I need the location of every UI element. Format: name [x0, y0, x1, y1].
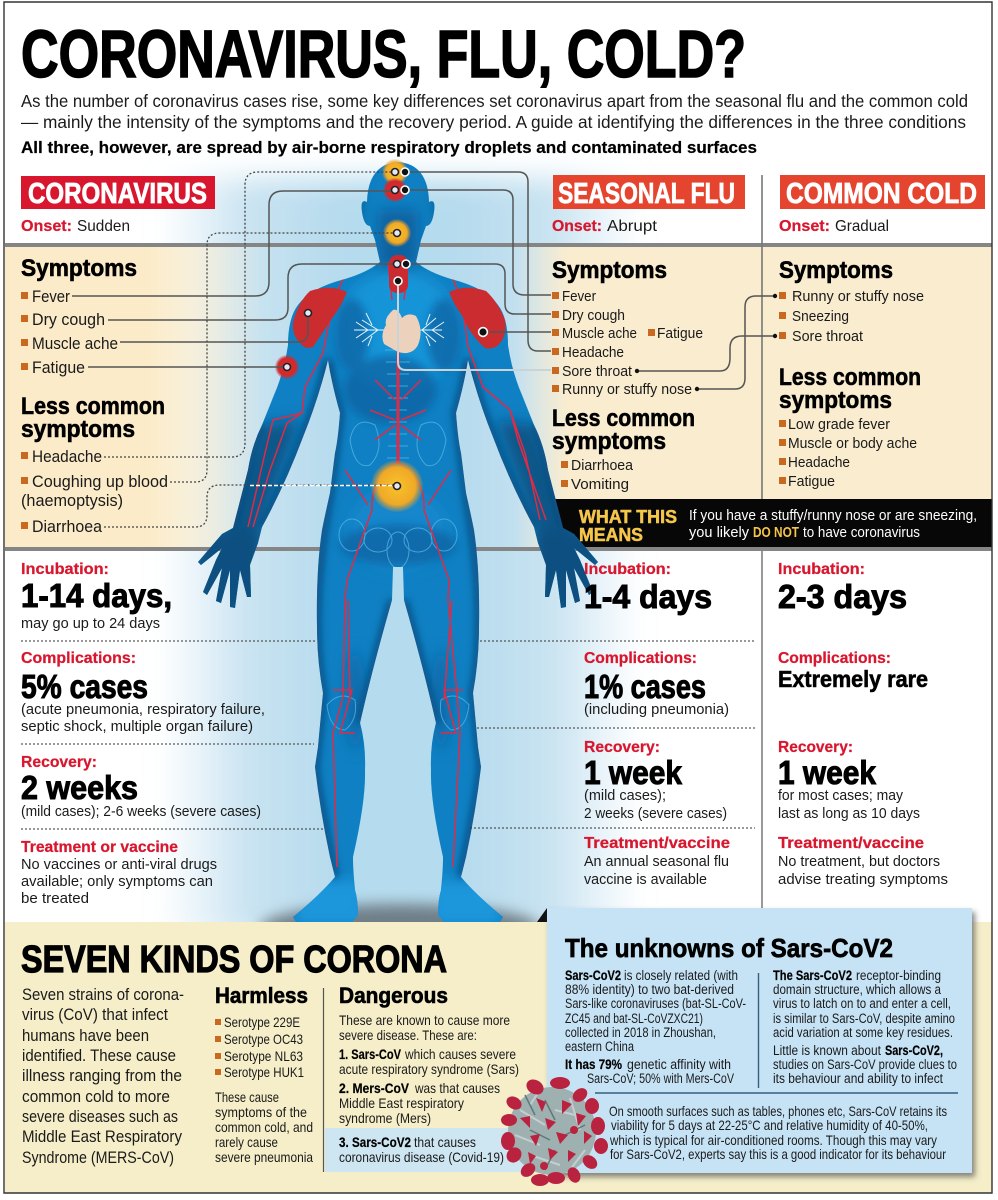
rim shading — [233, 360, 563, 877]
intro paragraph — [22, 985, 184, 1167]
right text column: studies on Sars-CoV provide clues to — [773, 1057, 957, 1072]
left text column — [565, 968, 746, 1086]
sars-cov2 highlight — [325, 1128, 525, 1172]
symptoms list: Symptoms — [779, 257, 893, 284]
left text column: Sars-like coronaviruses (bat-SL-CoV- — [565, 996, 746, 1011]
heading: The unknowns of Sars-CoV2 — [565, 933, 893, 963]
less common symptoms list: Diarrhoea — [32, 518, 103, 536]
left text column: Sars-CoV2 — [565, 968, 621, 983]
left text column: eastern China — [565, 1039, 634, 1054]
intro paragraph: Seven strains of corona- — [22, 985, 184, 1004]
dangerous column: 2. Mers-CoV — [339, 1080, 410, 1096]
right text column — [773, 968, 957, 1086]
dangerous column: syndrome (Mers) — [339, 1110, 431, 1126]
less common symptoms list — [552, 405, 695, 493]
right text column: acid variation at some key residues. — [773, 1025, 953, 1040]
organs shading — [335, 299, 461, 565]
complications — [778, 650, 928, 692]
dangerous column: 1. Sars-CoV — [339, 1046, 402, 1062]
treatment: Treatment/vaccine — [778, 835, 924, 852]
panel: common cold column — [778, 175, 985, 888]
recovery — [584, 739, 727, 822]
less common symptoms list: Fatigue — [788, 473, 835, 490]
recovery: Recovery: — [584, 739, 660, 756]
recovery — [778, 739, 920, 822]
surfaces paragraph: viability for 5 days at 22-25°C and relative humidity of 40-50%, — [611, 1117, 928, 1133]
symptoms list: Fatigue — [32, 359, 85, 377]
intro paragraph: common cold to more — [22, 1087, 170, 1106]
dangerous column: which causes severe — [404, 1046, 516, 1062]
treatment: No vaccines or anti-viral drugs — [21, 856, 217, 873]
intro text: All three, however, are spread by air-borne respiratory droplets and contaminated surfaces — [21, 138, 757, 157]
intro paragraph: Middle East Respiratory — [22, 1127, 182, 1146]
incubation — [778, 561, 907, 615]
recovery: for most cases; may — [778, 787, 903, 804]
icon: coronavirus particle — [501, 1076, 608, 1186]
right text column: Little is known about — [773, 1043, 881, 1058]
dangerous column: 3. Sars-CoV2 — [339, 1134, 411, 1150]
recovery: (mild cases); — [584, 787, 666, 804]
what this means callout: you likely — [689, 524, 749, 541]
less common symptoms list: (haemoptysis) — [21, 492, 123, 510]
incubation: 1-14 days, — [21, 577, 172, 614]
left text column: genetic affinity with — [627, 1057, 731, 1072]
treatment: vaccine is available — [584, 871, 707, 888]
symptoms list: Fever — [32, 288, 70, 306]
complications: Extremely rare — [778, 666, 928, 692]
connector dots — [284, 168, 777, 490]
symptoms list: Sneezing — [792, 308, 849, 325]
surfaces paragraph: which is typical for air-conditioned rooms. Though this may vary — [609, 1132, 937, 1148]
less common symptoms list: Low grade fever — [788, 416, 890, 433]
onset: Abrupt — [607, 218, 658, 235]
harmless column: common cold, and — [215, 1119, 313, 1135]
complications: Complications: — [778, 650, 891, 667]
bright and dark shading — [195, 153, 601, 925]
human body figure — [190, 153, 610, 925]
bones and organ outlines — [327, 350, 469, 730]
recovery: Recovery: — [778, 739, 853, 756]
complications: septic shock, multiple organ failure) — [21, 718, 253, 735]
symptoms list: Symptoms — [552, 257, 667, 284]
dangerous column — [339, 983, 519, 1165]
symptoms list: Runny or stuffy nose — [792, 288, 924, 305]
dangerous column: These are known to cause more — [339, 1012, 510, 1028]
less common symptoms list — [779, 364, 921, 490]
treatment: advise treating symptoms — [778, 871, 948, 888]
right text column: Sars-CoV2, — [885, 1043, 943, 1058]
intro text — [21, 91, 968, 157]
left text column: Sars-CoV; 50% with Mers-CoV — [587, 1071, 734, 1086]
harmless column: Serotype NL63 — [224, 1048, 303, 1064]
treatment: available; only symptoms can — [21, 873, 213, 890]
left text column: 88% identity) to two bat-derived — [565, 982, 734, 997]
symptoms list: Dry cough — [32, 311, 105, 329]
harmless column: Harmless — [215, 983, 308, 1008]
complications: Complications: — [584, 650, 697, 667]
panel: seasonal flu column — [470, 175, 755, 888]
intro paragraph: virus (CoV) that infect — [22, 1005, 168, 1024]
onset: Gradual — [835, 218, 889, 235]
less common symptoms list: Headache — [32, 448, 102, 466]
left text column: collected in 2018 in Zhoushan, — [565, 1025, 716, 1040]
dangerous column: Dangerous — [339, 983, 448, 1008]
complications: (including pneumonia) — [584, 701, 729, 718]
connector lines — [72, 172, 774, 527]
incubation: Incubation: — [584, 561, 671, 578]
onset — [779, 218, 889, 235]
symptoms list: Fatigue — [657, 325, 703, 342]
less common symptoms list: symptoms — [552, 428, 666, 455]
treatment: No treatment, but doctors — [778, 853, 940, 870]
recovery: 1 week — [778, 754, 877, 791]
complications: (acute pneumonia, respiratory failure, — [21, 701, 265, 718]
treatment: be treated — [21, 890, 89, 907]
treatment — [778, 835, 948, 888]
less common symptoms list: symptoms — [21, 416, 135, 443]
complications: 5% cases — [21, 668, 148, 705]
less common symptoms list: Less common — [552, 405, 695, 432]
harmless column: Serotype 229E — [224, 1014, 300, 1030]
panel: coronavirus column — [21, 176, 325, 907]
what this means callout: If you have a stuffy/runny nose or are sneezing, — [689, 507, 977, 524]
treatment: An annual seasonal flu — [584, 853, 729, 870]
symptoms list: Sore throat — [792, 328, 864, 345]
panel: the unknowns of Sars-CoV2 — [537, 908, 972, 1173]
intro paragraph: Syndrome (MERS-CoV) — [22, 1148, 174, 1167]
symptom hot spots — [275, 159, 505, 512]
left text column: It has 79% — [565, 1057, 622, 1072]
incubation: 1-4 days — [584, 578, 712, 615]
lungs — [354, 313, 444, 346]
heart — [382, 310, 421, 353]
incubation: 2-3 days — [778, 578, 907, 615]
complications — [21, 650, 265, 735]
less common symptoms list: Vomiting — [571, 476, 629, 493]
recovery: 2 weeks — [21, 769, 138, 806]
symptoms list: Sore throat — [562, 363, 633, 380]
complications: Complications: — [21, 650, 136, 667]
treatment — [21, 839, 217, 907]
onset — [21, 218, 130, 235]
less common symptoms list: Less common — [779, 364, 921, 391]
harmless column: Serotype HUK1 — [224, 1064, 304, 1080]
treatment — [584, 835, 730, 888]
intro text: — mainly the intensity of the symptoms and the recovery period. A guide at identifying the differences in the three conditions — [21, 112, 966, 132]
what this means callout: MEANS — [579, 525, 643, 545]
less common symptoms list: Coughing up blood — [32, 473, 168, 491]
dangerous column: Middle East respiratory — [339, 1095, 464, 1111]
left text column: ZC45 and bat-SL-CoVZXC21) — [565, 1011, 703, 1026]
dangerous column: that causes — [414, 1134, 476, 1150]
right text column: is similar to Sars-CoV, despite amino — [773, 1011, 955, 1026]
recovery: 2 weeks (severe cases) — [584, 805, 727, 822]
what this means callout: to have coronavirus — [803, 524, 920, 541]
harmless column: severe pneumonia — [215, 1149, 313, 1165]
what this means callout: WHAT THIS — [579, 507, 677, 527]
intro paragraph: illness ranging from the — [22, 1066, 182, 1085]
black what-this-means band — [551, 499, 992, 550]
onset — [552, 218, 658, 235]
dangerous column: coronavirus disease (Covid-19) — [339, 1149, 504, 1165]
recovery: (mild cases); 2-6 weeks (severe cases) — [21, 803, 261, 820]
right text column: virus to latch on to and enter a cell, — [773, 996, 951, 1011]
incubation: may go up to 24 days — [21, 615, 160, 632]
symptoms list: Muscle ache — [32, 335, 118, 353]
less common symptoms list: Less common — [21, 393, 165, 420]
recovery: last as long as 10 days — [778, 805, 920, 822]
complications: 1% cases — [584, 668, 706, 705]
onset: Onset: — [779, 218, 830, 235]
floor shadow — [260, 904, 540, 952]
recovery: 1 week — [584, 754, 683, 791]
blood vessels — [248, 262, 546, 867]
right text column: domain structure, which allows a — [773, 982, 941, 997]
onset: Sudden — [77, 218, 130, 235]
symptoms list — [21, 255, 137, 377]
intro text: As the number of coronavirus cases rise, some key differences set coronavirus apart from the seasonal flu and the common cold — [21, 91, 968, 111]
less common symptoms list: Headache — [788, 454, 850, 471]
incubation — [584, 561, 712, 615]
harmless column: rarely cause — [215, 1134, 278, 1150]
symptoms list: Dry cough — [562, 307, 625, 324]
less common symptoms list — [21, 393, 168, 536]
symptoms list: Headache — [562, 344, 624, 361]
onset: Onset: — [21, 218, 72, 235]
harmless column — [215, 983, 313, 1165]
intro paragraph: identified. These cause — [22, 1046, 176, 1065]
right text column: its behaviour and ability to infect — [773, 1071, 943, 1086]
title: CORONAVIRUS, FLU, COLD? — [21, 17, 746, 92]
panel: seven kinds of corona — [5, 922, 992, 1193]
onset: Onset: — [552, 218, 602, 235]
left text column: is closely related (with — [624, 968, 738, 983]
incubation: Incubation: — [778, 561, 865, 578]
harmless column: symptoms of the — [215, 1104, 307, 1120]
intro paragraph: severe diseases such as — [22, 1107, 178, 1126]
less common symptoms list: Diarrhoea — [571, 457, 634, 474]
harmless column: Serotype OC43 — [224, 1031, 303, 1047]
symptoms list: Muscle ache — [562, 325, 637, 342]
symptoms list: Runny or stuffy nose — [562, 381, 692, 398]
symptoms list — [552, 257, 703, 398]
less common symptoms list: Muscle or body ache — [788, 435, 917, 452]
harmless column: These cause — [215, 1089, 279, 1105]
symptoms list: Fever — [562, 288, 596, 305]
treatment: Treatment/vaccine — [584, 835, 730, 852]
right text column: The Sars-CoV2 — [773, 968, 852, 983]
dangerous column: acute respiratory syndrome (Sars) — [339, 1061, 519, 1077]
symptoms list: Symptoms — [21, 255, 137, 282]
treatment: Treatment or vaccine — [21, 839, 178, 856]
complications — [584, 650, 729, 718]
intro paragraph: humans have been — [22, 1026, 149, 1045]
recovery: Recovery: — [21, 754, 97, 771]
what this means callout — [579, 507, 977, 545]
dangerous column: severe disease. These are: — [339, 1027, 477, 1043]
recovery — [21, 754, 261, 820]
what this means callout: DO NOT — [753, 525, 799, 541]
coronavirus header: CORONAVIRUS — [28, 178, 207, 210]
heading: SEVEN KINDS OF CORONA — [21, 939, 447, 981]
incubation — [21, 561, 172, 632]
incubation: Incubation: — [21, 561, 109, 578]
symptoms list — [779, 257, 924, 345]
seasonal flu header: SEASONAL FLU — [558, 178, 735, 210]
dangerous column: was that causes — [414, 1080, 500, 1096]
less common symptoms list: symptoms — [779, 387, 892, 414]
surfaces paragraph — [609, 1103, 947, 1162]
right text column: receptor-binding — [856, 968, 941, 983]
